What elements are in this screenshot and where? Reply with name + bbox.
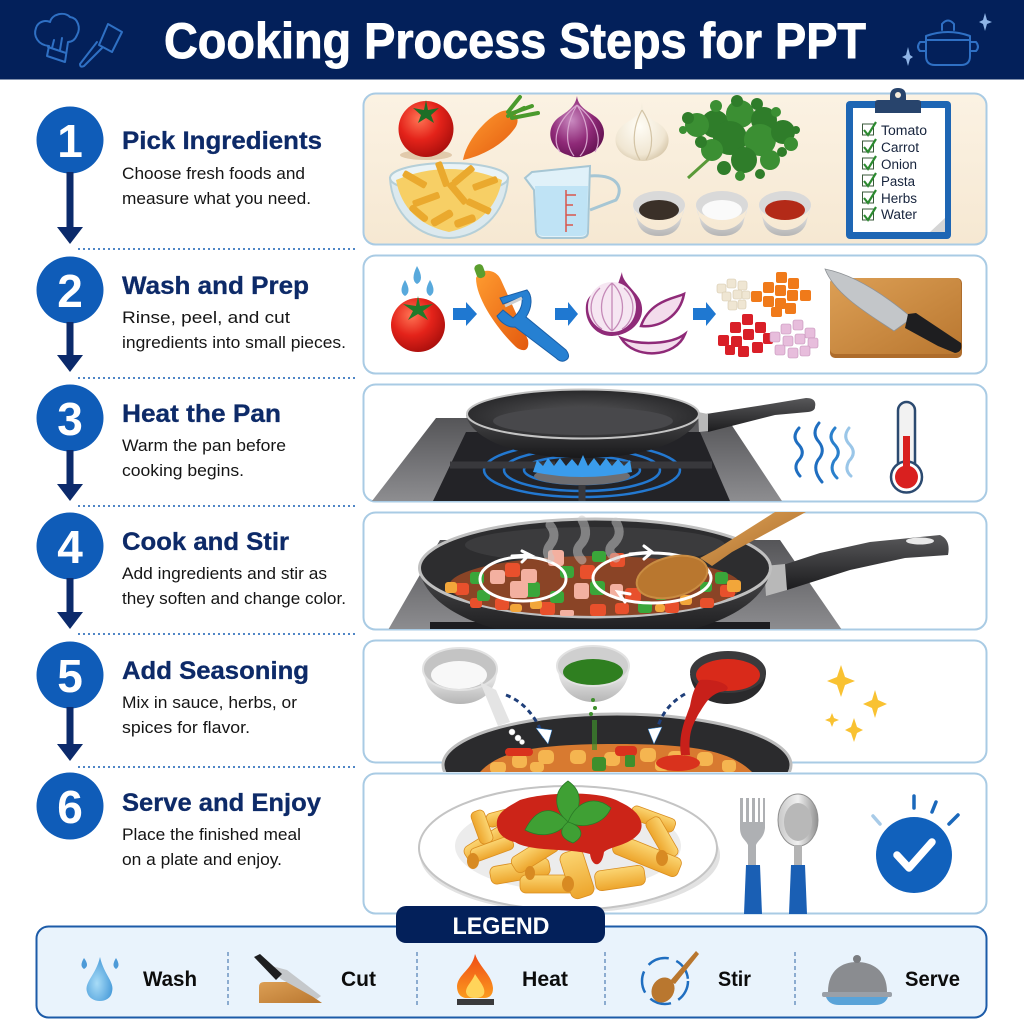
glass bowl of pasta [390,161,508,238]
pan connector [764,564,787,596]
number badge 3 [36,384,104,452]
description 2: ingredients into small pieces. [122,333,346,352]
checklist text: Herbs [881,191,917,206]
legend: heat [457,954,568,1005]
panel: cook and stir [364,512,986,640]
handle hole [906,538,934,544]
tomato [398,100,454,160]
washed tomato [391,296,445,352]
legend: wash: Wash [143,968,197,991]
description 3: cooking begins. [122,461,244,480]
checklist text: Tomato [881,123,927,138]
knife on cutting board [825,269,962,358]
checklist text: Water [881,207,917,222]
number badge 2: 2 [57,265,83,317]
checklist text: Carrot [881,140,919,155]
icon: sparkles [902,13,992,66]
spoon [778,794,818,914]
arrow 3 [57,450,83,501]
tomato sauce [497,794,642,864]
panel: heat the pan [364,384,986,502]
header banner [0,0,1024,80]
description 4: they soften and change color. [122,589,346,608]
legend title: LEGEND [452,913,550,940]
number badge 4: 4 [57,521,83,573]
stir fry vegetables [445,550,741,616]
arrow heads [536,727,662,744]
parsley bunch [679,95,800,181]
checklist text [881,123,927,222]
description 3 [122,436,286,480]
thermometer [891,402,922,492]
step 5 label [36,642,309,761]
number badge 1: 1 [57,115,83,167]
arrow 2 [57,322,83,372]
heading 5: Add Seasoning [122,657,309,685]
step 4 label [36,512,346,629]
herb drizzle [589,698,597,750]
legend: heat: Heat [522,968,568,991]
description 1 [122,164,311,208]
garlic [615,103,669,161]
step 1 label [36,106,322,244]
description 6: Place the finished meal [122,825,301,844]
description 4 [122,564,346,608]
number badge 4 [36,512,104,580]
heading 2: Wash and Prep [122,272,309,300]
description 4: Add ingredients and stir as [122,564,327,583]
salt grains [509,729,524,744]
description 2 [122,308,346,352]
legend: serve: Serve [905,968,960,991]
description 6: on a plate and enjoy. [122,850,282,869]
number badge 5: 5 [57,650,83,702]
description 6 [122,825,301,869]
stir motion arrows [480,546,711,603]
seasoning bowls [633,191,811,236]
description 5: Mix in sauce, herbs, or [122,693,297,712]
gas stove [372,418,782,501]
number badge 3: 3 [57,393,83,445]
heading 6: Serve and Enjoy [122,789,321,817]
panel: wash and prep [364,256,986,374]
arrow 4 [57,578,83,629]
salt bowl [423,648,510,726]
heading 1: Pick Ingredients [122,127,322,155]
water drops [402,266,434,296]
step 6 label [36,772,321,869]
heading 4: Cook and Stir [122,528,289,556]
fork [740,798,765,914]
number badge 6: 6 [57,781,83,833]
legend: cut: Cut [341,968,376,991]
description 5 [122,693,297,737]
step 2 label [36,256,346,372]
panel: add seasoning [362,640,988,772]
red onion [550,96,604,157]
checklist text: Onion [881,157,917,172]
arrow 1 [57,172,83,244]
legend: wash [82,957,197,1001]
carrot [463,97,538,160]
description 1: Choose fresh foods and [122,164,305,183]
icon: spatula [80,24,122,67]
legend: stir [642,951,751,1007]
icon: chef hat [35,14,79,62]
legend: stir: Stir [718,968,751,991]
arrow 5 [57,707,83,761]
rigatoni pasta [462,802,683,901]
diced white [717,279,750,310]
frying pan [418,518,772,622]
steam [548,520,619,560]
legend title [396,906,605,943]
flames [533,455,632,477]
seasoning pan [442,712,792,772]
stove top [388,540,842,630]
check marks [864,122,876,220]
panel: serve and enjoy [364,774,986,914]
pan handle [783,535,949,590]
number badge 1 [36,106,104,174]
number badge 6 [36,772,104,840]
diced tomato [718,314,773,357]
check badge [873,796,958,893]
plate [419,786,720,913]
sauce bowl [680,651,766,755]
description 5: spices for flavor. [122,718,250,737]
panel: ingredients [364,88,986,244]
title: Cooking Process Steps for PPT [164,13,866,69]
arrow right [555,302,578,326]
wooden spoon [632,512,806,605]
description 2: Rinse, peel, and cut [122,308,290,327]
diced purple onion [770,320,818,358]
checkboxes [862,124,874,220]
heat waves [795,423,853,482]
clipboard checklist [846,88,951,239]
cut onion [586,272,685,353]
legend: serve [822,955,960,1005]
description 3: Warm the pan before [122,436,286,455]
number badge 2 [36,256,104,324]
measuring cup [525,166,619,238]
legend: cut [254,954,376,1003]
diced carrot [751,272,811,317]
rigatoni open ends [467,850,668,892]
arrow right [453,302,477,326]
icon: cooking pot [918,20,978,65]
heading 3: Heat the Pan [122,400,281,428]
sprinkle dashed arrows [506,694,685,738]
burner rings [484,443,680,497]
checklist text: Pasta [881,174,915,189]
arrow right [693,302,716,326]
golden sparkles [825,665,887,742]
frying pan [466,390,815,458]
herb bowl [557,646,629,702]
number badge 5 [36,642,104,708]
carrot and peeler [473,263,569,361]
step 3 label [36,384,286,501]
basil leaves [525,781,611,843]
legend panel [36,906,986,1018]
description 1: measure what you need. [122,189,311,208]
